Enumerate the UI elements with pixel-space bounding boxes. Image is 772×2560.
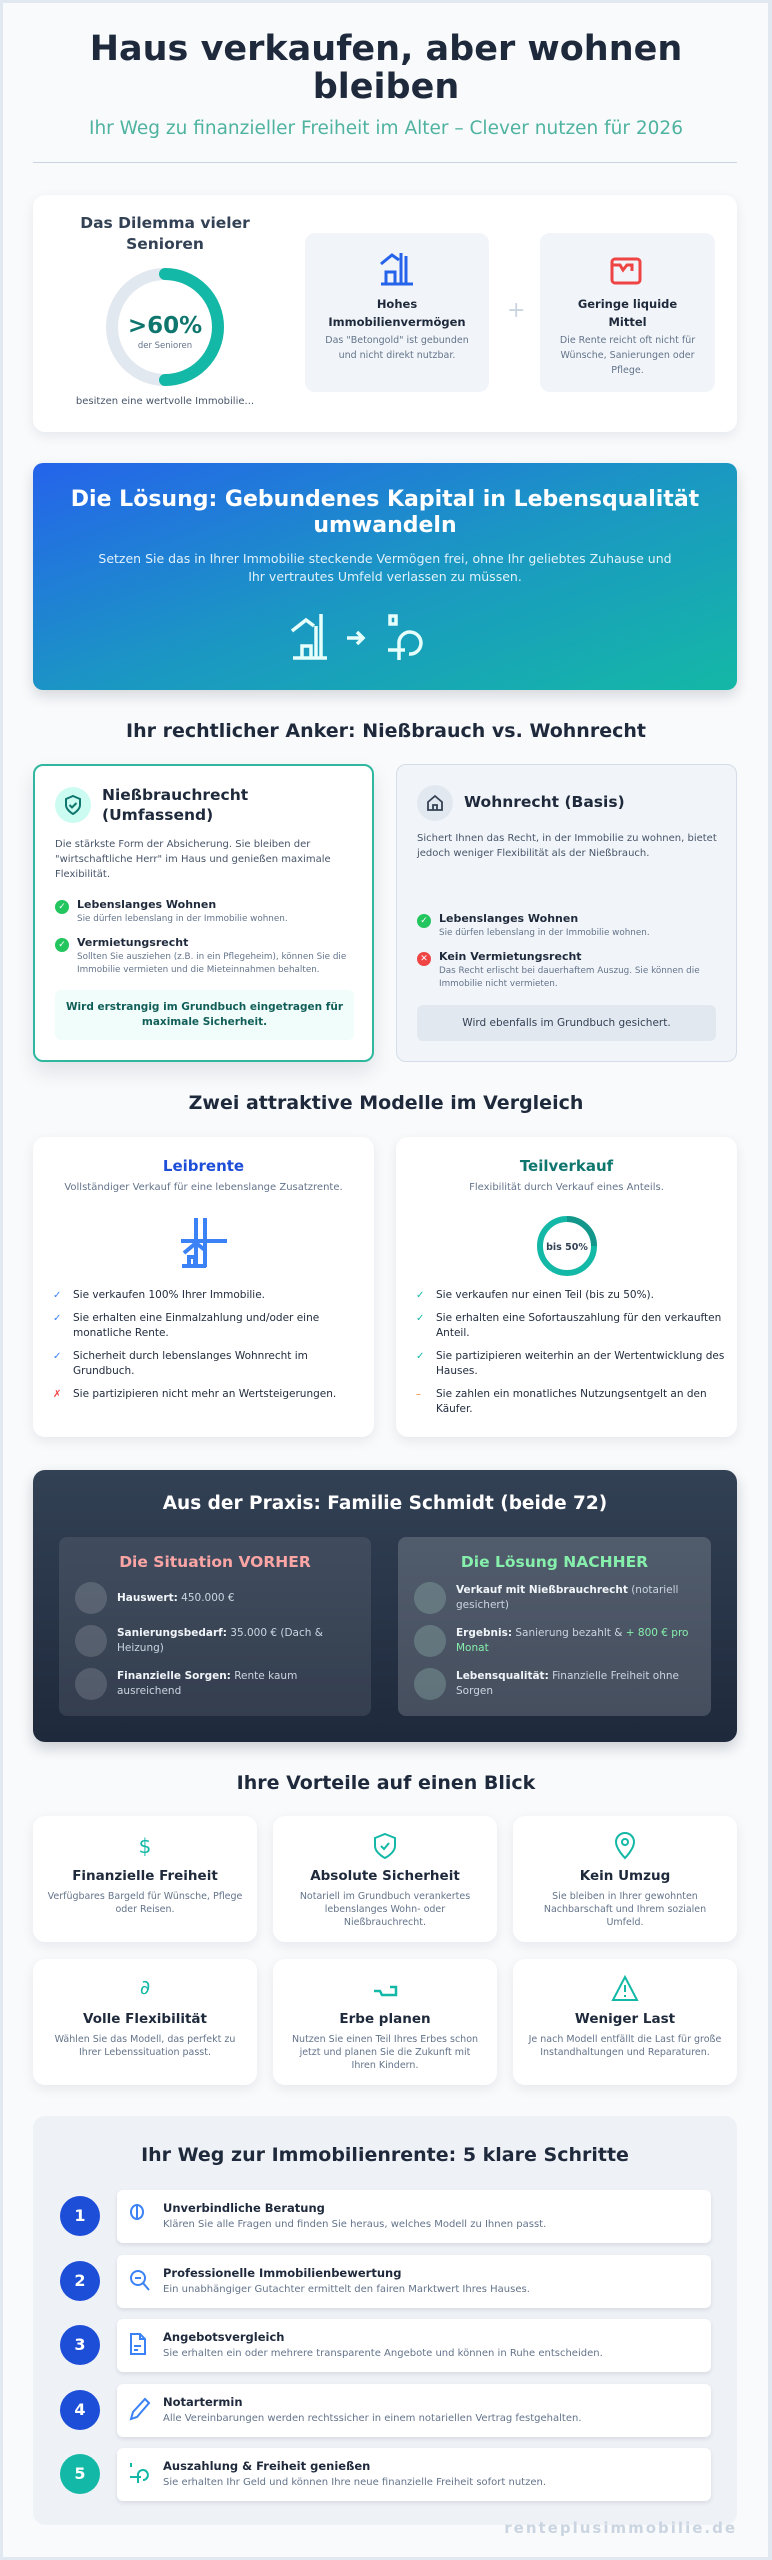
card: weniger last: Je nach Modell entfällt die Last für große Instandhaltungen und Reparaturen. <box>529 2034 721 2058</box>
bullet: lebenslanges wohnen: Sie dürfen lebenslang in der Immobilie wohnen. <box>77 914 288 924</box>
step 3: Angebotsvergleich <box>163 2330 284 2344</box>
panel: niessbrauchrecht: (Umfassend) <box>102 806 213 824</box>
panel: nachher: Ergebnis: Sanierung bezahlt & + 800 € pro Monat <box>456 1627 688 1654</box>
panel: leibrente: Sie verkaufen 100% Ihrer Immobilie. <box>73 1289 265 1301</box>
panel: teilverkauf: ✓ <box>416 1351 424 1362</box>
panel: leibrente: Vollständiger Verkauf für eine lebenslange Zusatzrente. <box>64 1182 343 1193</box>
panel: nachher <box>398 1537 711 1716</box>
bullet: lebenslanges wohnen <box>417 912 650 938</box>
grid: vorteile <box>32 1832 738 2090</box>
panel: dilemma <box>33 195 737 432</box>
bullet: kein vermietungsrecht: Kein Vermietungsrecht <box>439 950 582 963</box>
panel: niessbrauchrecht: Die stärkste Form der Absicherung. Sie bleiben der "wirtschaftliche Herr" im Haus und genießen maximale Flexibilität. <box>55 839 331 880</box>
step 4: Notartermin <box>163 2395 243 2409</box>
card: weniger last: Weniger Last <box>575 2011 675 2027</box>
panel: teilverkauf: – <box>416 1389 421 1400</box>
panel: wohnrecht <box>396 764 737 1062</box>
card: kein umzug <box>513 1816 737 1942</box>
banner text: Setzen Sie das in Ihrer Immobilie steckende Vermögen frei, ohne Ihr geliebtes Zuhause und Ihr vertrautes Umfeld verlassen zu müssen. <box>98 551 672 584</box>
dilemma heading: Das Dilemma vieler Senioren <box>80 214 250 253</box>
step 4 <box>60 2384 712 2440</box>
panel: niessbrauchrecht: Nießbrauchrecht <box>102 786 248 804</box>
step 1 <box>60 2190 712 2246</box>
bullet: lebenslanges wohnen: ✓ <box>420 916 428 926</box>
panel: vorher <box>59 1537 371 1716</box>
panel: teilverkauf: Teilverkauf <box>520 1157 613 1175</box>
panel: teilverkauf: ✓ <box>416 1290 424 1301</box>
panel: teilverkauf: ✓ <box>416 1313 424 1324</box>
dilemma caption: besitzen eine wertvolle Immobilie... <box>76 396 254 407</box>
card: finanzielle freiheit: Verfügbares Bargeld für Wünsche, Pflege oder Reisen. <box>48 1891 242 1915</box>
card: erbe planen: Nutzen Sie einen Teil Ihres Erbes schon jetzt und planen Sie die Zukunft mit Ihren Kindern. <box>292 2034 478 2071</box>
bullet: kein vermietungsrecht <box>417 950 700 989</box>
panel: niessbrauchrecht <box>33 764 374 1062</box>
panel: leibrente: ✓ <box>53 1313 61 1324</box>
step 3: 3 <box>74 2335 86 2354</box>
panel: 5 schritte: Ihr Weg zur Immobilienrente: 5 klare Schritte <box>141 2144 629 2166</box>
icon: wallet <box>610 258 642 284</box>
box: hohes vermoegen: Hohes Immobilienvermögen <box>328 297 466 329</box>
panel: teilverkauf <box>396 1137 737 1437</box>
bullet: lebenslanges wohnen: ✓ <box>58 902 66 912</box>
step 5: Sie erhalten Ihr Geld und können Ihre neue finanzielle Freiheit sofort nutzen. <box>163 2477 546 2488</box>
plus: + <box>507 298 525 323</box>
panel: loesung banner <box>33 463 737 690</box>
panel: teilverkauf: Sie verkaufen nur einen Teil (bis zu 50%). <box>436 1289 654 1301</box>
heading: modelle: Zwei attraktive Modelle im Vergleich <box>189 1092 583 1114</box>
panel: vorher: Hauswert: 450.000 € <box>117 1592 235 1604</box>
step 2: Ein unabhängiger Gutachter ermittelt den fairen Marktwert Ihres Hauses. <box>163 2284 530 2295</box>
step 1: 1 <box>74 2206 86 2225</box>
card: erbe planen <box>273 1959 497 2085</box>
panel: vorher: Finanzielle Sorgen: Rente kaum ausreichend <box>117 1670 297 1697</box>
heading: vorteile: Ihre Vorteile auf einen Blick <box>237 1772 535 1794</box>
panel: leibrente: Sicherheit durch lebenslanges Wohnrecht im Grundbuch. <box>73 1350 308 1377</box>
step 1: Unverbindliche Beratung <box>163 2201 325 2215</box>
panel: leibrente: ✓ <box>53 1290 61 1301</box>
title: Haus verkaufen, aber wohnen bleiben <box>90 29 682 107</box>
icon: house <box>417 785 453 821</box>
panel: vorher: Die Situation VORHER <box>119 1553 311 1571</box>
step 2 <box>60 2255 712 2311</box>
box: geringe mittel <box>540 233 715 392</box>
bullet: vermietungsrecht: ✓ <box>58 940 66 950</box>
card: sicherheit: Absolute Sicherheit <box>310 1868 460 1884</box>
icon: shield <box>55 787 91 823</box>
box: geringe mittel: Die Rente reicht oft nicht für Wünsche, Sanierungen oder Pflege. <box>560 335 695 376</box>
card: flexibilitaet <box>33 1959 257 2085</box>
panel: teilverkauf: Sie partizipieren weiterhin an der Wertentwicklung des Hauses. <box>436 1350 724 1377</box>
card: kein umzug: Kein Umzug <box>580 1868 670 1884</box>
card: finanzielle freiheit <box>33 1816 257 1942</box>
step 5: Auszahlung & Freiheit genießen <box>163 2459 370 2473</box>
panel: nachher: Die Lösung NACHHER <box>461 1553 648 1571</box>
donut chart: >60% <box>128 313 202 339</box>
step 1: Klären Sie alle Fragen und finden Sie heraus, welches Modell zu Ihnen passt. <box>163 2219 546 2230</box>
bullet: lebenslanges wohnen: Sie dürfen lebenslang in der Immobilie wohnen. <box>439 928 650 938</box>
panel: teilverkauf: Sie erhalten eine Sofortauszahlung für den verkauften Anteil. <box>436 1312 721 1339</box>
bullet: kein vermietungsrecht: Das Recht erlischt bei dauerhaftem Auszug. Sie können die Immobilie nicht vermieten. <box>439 966 700 989</box>
panel: 5 schritte <box>33 2116 737 2525</box>
card: erbe planen: Erbe planen <box>339 2011 431 2027</box>
bullet: vermietungsrecht: Sollten Sie ausziehen (z.B. in ein Pflegeheim), können Sie die Immobilie vermieten und die Mieteinnahmen behalten. <box>77 952 346 975</box>
donut chart: der Senioren <box>138 341 192 351</box>
note: grundbuch: Wird erstrangig im Grundbuch eingetragen für maximale Sicherheit. <box>66 1001 343 1028</box>
card: weniger last <box>513 1959 737 2085</box>
card: flexibilitaet: ∂ <box>140 1975 150 1999</box>
step 4: Alle Vereinbarungen werden rechtssicher in einem notariellen Vertrag festgehalten. <box>163 2413 582 2424</box>
bullet: lebenslanges wohnen: Lebenslanges Wohnen <box>77 898 216 911</box>
box: hohes vermoegen <box>305 233 489 392</box>
panel: leibrente: Leibrente <box>163 1157 244 1175</box>
card: kein umzug: Sie bleiben in Ihrer gewohnten Nachbarschaft und Ihrem sozialen Umfeld. <box>544 1891 706 1928</box>
note: grundbuch <box>417 1005 716 1041</box>
panel: leibrente: ✗ <box>53 1389 61 1400</box>
step 2: Professionelle Immobilienbewertung <box>163 2266 401 2280</box>
box: geringe mittel: Geringe liquide Mittel <box>578 297 677 329</box>
icon: house <box>380 253 413 286</box>
bullet: kein vermietungsrecht: ✕ <box>420 954 428 964</box>
card: finanzielle freiheit: Finanzielle Freiheit <box>72 1868 218 1884</box>
panel: praxis: Aus der Praxis: Familie Schmidt (beide 72) <box>163 1493 607 1514</box>
note: grundbuch: Wird ebenfalls im Grundbuch gesichert. <box>462 1017 671 1029</box>
panel: teilverkauf: Flexibilität durch Verkauf eines Anteils. <box>469 1182 664 1193</box>
footer: brand: renteplusimmobilie.de <box>504 2519 737 2537</box>
panel: wohnrecht: Wohnrecht (Basis) <box>464 793 625 811</box>
step 5: 5 <box>74 2464 86 2483</box>
donut chart <box>106 268 224 386</box>
step 3: Sie erhalten ein oder mehrere transparente Angebote und können in Ruhe entscheiden. <box>163 2348 603 2359</box>
bullet: vermietungsrecht: Vermietungsrecht <box>77 936 188 949</box>
icon: house sold <box>181 1218 227 1268</box>
chart: bis 50% ring <box>537 1216 597 1276</box>
step 5 <box>60 2448 712 2504</box>
panel: teilverkauf: Sie zahlen ein monatliches Nutzungsentgelt an den Käufer. <box>436 1388 707 1415</box>
heading: rechtlicher anker: Ihr rechtlicher Anker: Nießbrauch vs. Wohnrecht <box>126 720 646 742</box>
panel: leibrente: ✓ <box>53 1351 61 1362</box>
card: sicherheit <box>273 1816 497 1942</box>
note: grundbuch <box>55 990 354 1040</box>
panel: leibrente: Sie partizipieren nicht mehr an Wertsteigerungen. <box>73 1388 336 1400</box>
card: flexibilitaet: Wählen Sie das Modell, das perfekt zu Ihrer Lebenssituation passt. <box>55 2034 235 2058</box>
panel: vorher: Sanierungsbedarf: 35.000 € (Dach & Heizung) <box>117 1627 323 1654</box>
bullet: lebenslanges wohnen <box>55 898 288 924</box>
card: flexibilitaet: Volle Flexibilität <box>83 2011 207 2027</box>
bullet: vermietungsrecht <box>55 936 346 975</box>
panel: nachher: Verkauf mit Nießbrauchrecht (notariell gesichert) <box>456 1584 678 1611</box>
step 3 <box>60 2319 712 2375</box>
box: hohes vermoegen: Das "Betongold" ist gebunden und nicht direkt nutzbar. <box>325 335 469 361</box>
step 4: 4 <box>74 2400 86 2419</box>
panel: leibrente <box>33 1137 374 1437</box>
bullet: lebenslanges wohnen: Lebenslanges Wohnen <box>439 912 578 925</box>
subtitle: Ihr Weg zu finanzieller Freiheit im Alter – Clever nutzen für 2026 <box>89 118 683 139</box>
card: sicherheit: Notariell im Grundbuch verankertes lebenslanges Wohn- oder Nießbrauchrecht. <box>300 1891 470 1928</box>
chart: bis 50% ring: bis 50% <box>546 1242 588 1253</box>
card: finanzielle freiheit: $ <box>139 1834 151 1858</box>
banner heading: Die Lösung: Gebundenes Kapital in Lebensqualität umwandeln <box>71 487 699 538</box>
panel: wohnrecht: Sichert Ihnen das Recht, in der Immobilie zu wohnen, bietet jedoch weniger Flexibilität als der Nießbrauch. <box>417 833 717 859</box>
panel: nachher: Lebensqualität: Finanzielle Freiheit ohne Sorgen <box>456 1670 679 1697</box>
icons: house to money <box>291 614 423 660</box>
step 2: 2 <box>74 2271 86 2290</box>
panel: praxis <box>33 1470 737 1742</box>
panel: leibrente: Sie erhalten eine Einmalzahlung und/oder eine monatliche Rente. <box>73 1312 319 1339</box>
